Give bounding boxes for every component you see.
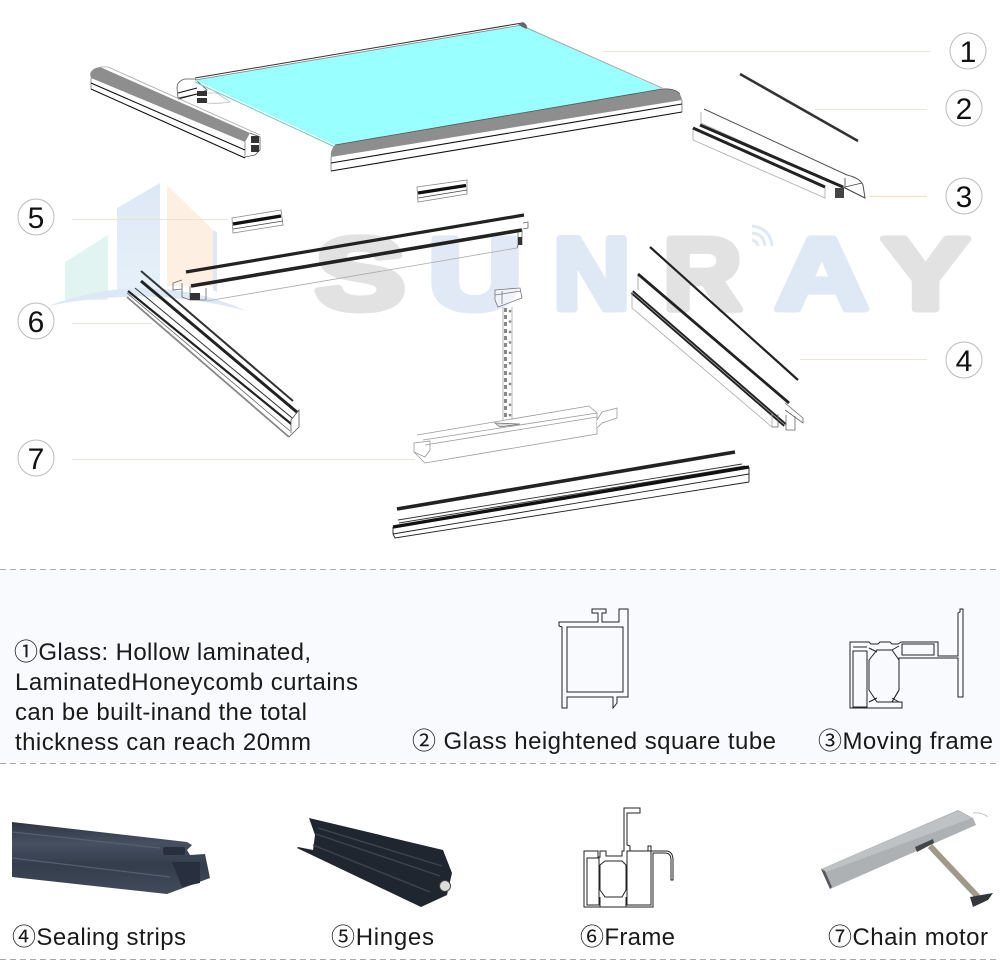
glass edges [195, 22, 662, 147]
image: sealing strip [12, 822, 210, 894]
label: sealing strips: ④Sealing strips [12, 924, 186, 951]
image: hinge [297, 818, 452, 907]
part 3: moving frame rail [693, 109, 865, 198]
logo house [48, 183, 247, 311]
back left bracket [177, 79, 230, 103]
chain [503, 307, 512, 423]
callout 7: 7 [28, 443, 44, 476]
logo wordmark: A [775, 216, 869, 331]
image: chain motor [821, 810, 993, 907]
icon: square tube profile [559, 609, 628, 708]
text block: glass description: ①Glass: Hollow laminated, [14, 639, 311, 666]
callout 3: 3 [956, 181, 972, 214]
label: frame: ⑥Frame [580, 924, 675, 951]
logo wordmark: N [553, 217, 630, 331]
left side rail [90, 67, 260, 158]
chain base [495, 423, 520, 427]
label: hinges: ⑤Hinges [331, 924, 434, 951]
logo wordmark: U [428, 217, 522, 331]
logo wordmark [315, 216, 969, 331]
logo watermark [48, 183, 969, 331]
callout 4: 4 [956, 345, 972, 378]
callout 1 [950, 33, 986, 69]
callout 7 [18, 440, 54, 476]
glass panel [195, 25, 662, 145]
chain head [495, 288, 522, 307]
footer divider [0, 958, 1000, 960]
part 2: rod [740, 74, 858, 141]
part 6: left frame rails [127, 271, 299, 437]
text block: glass description: thickness can reach 20mm [15, 729, 311, 756]
icon: moving frame profile [850, 609, 963, 708]
text block: glass description: LaminatedHoneycomb curtains [15, 669, 358, 696]
logo wifi arcs [752, 226, 772, 246]
callout 1: 1 [960, 36, 976, 69]
part 4: right frame rails [632, 247, 803, 430]
icon: frame profile [584, 808, 673, 907]
callout 2 [946, 90, 982, 126]
part 5: hinge right [417, 180, 467, 202]
motor body [414, 406, 597, 463]
callout 5: 5 [28, 202, 44, 235]
callout 6: 6 [28, 306, 44, 339]
logo wordmark: Y [882, 217, 969, 331]
glass roof assembly [177, 22, 682, 171]
label: chain motor: ⑦Chain motor [828, 924, 988, 951]
label: moving frame: ③Moving frame [818, 728, 993, 755]
part 5: hinge left [232, 210, 283, 233]
logo wordmark: S [315, 217, 405, 331]
part 7: chain motor drawing [414, 288, 617, 463]
callout 4 [946, 342, 982, 378]
motor plug [597, 408, 617, 428]
callout 3 [946, 178, 982, 214]
bottom rail [393, 452, 749, 538]
callout 6 [18, 303, 54, 339]
leader lines [72, 52, 931, 460]
text block: glass description: can be built-inand the total [15, 699, 307, 726]
text block: glass description [14, 639, 358, 756]
callout 5 [18, 199, 54, 235]
callout 2: 2 [956, 93, 972, 126]
front rail [331, 89, 682, 171]
logo wordmark: R [663, 217, 742, 331]
panel: description band [0, 570, 1000, 764]
label: square tube: ② Glass heightened square tube [412, 728, 776, 755]
upper frame rail [173, 215, 528, 301]
